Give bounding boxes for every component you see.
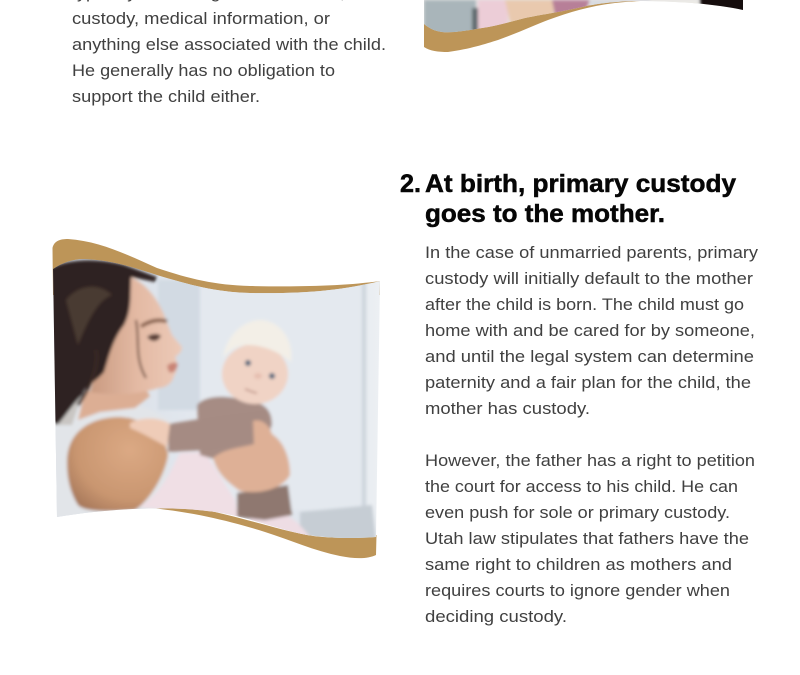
text block: first point continued: custody, medical information, or [72,9,330,28]
text block: primary custody paragraph: mother has custody. [425,399,590,418]
gold wave bottom [140,505,376,558]
text block: first point continued: He generally has no obligation to [72,61,335,80]
hair [50,260,157,424]
text block: primary custody paragraph: and until the legal system can determine [425,347,754,366]
grey wall behind wisps [56,394,82,426]
baby body [197,397,272,465]
text block: father's rights paragraph [425,451,755,626]
heading: point 2: goes to the mother. [425,200,665,228]
neck [77,390,151,421]
eye, brow and lips [147,334,161,341]
text block: primary custody paragraph [425,243,759,418]
text block: father's rights paragraph: requires courts to ignore gender when [425,581,730,600]
text block: primary custody paragraph: In the case of unmarried parents, primary [425,243,759,262]
gold wave top [52,239,380,295]
text block: first point continued: anything else associated with the child. [72,35,386,54]
baby hat [223,320,291,362]
heading: point 2: 2. [400,170,421,198]
baby arm [166,418,202,454]
pink blanket [140,452,238,518]
baby face [222,344,288,404]
text block: father's rights paragraph: Utah law stipulates that fathers have the [425,529,749,548]
shoulder [67,417,168,511]
text block: primary custody paragraph: custody will initially default to the mother [425,269,753,288]
text block: father's rights paragraph: the court for access to his child. He can [425,477,738,496]
tank top [56,410,169,517]
text block: first point continued: support the child either. [72,87,260,106]
text block: father's rights paragraph: deciding custody. [425,607,567,626]
mother hand [213,420,290,492]
image: top photo remnant with gold wave [424,0,750,52]
text block: first point continued [72,0,386,106]
heading: point 2: At birth, primary custody [425,170,736,198]
text block: father's rights paragraph: same right to children as mothers and [425,555,732,574]
text block: primary custody paragraph: paternity and a fair plan for the child, the [425,373,751,392]
text block: primary custody paragraph: after the child is born. The child must go [425,295,744,314]
photo [50,255,385,545]
text block: father's rights paragraph: even push for sole or primary custody. [425,503,730,522]
image: mother holding baby with gold wave frame [50,239,385,558]
baby leg [237,485,292,520]
text block: father's rights paragraph: However, the father has a right to petition [425,451,755,470]
heading: point 2 [400,170,736,228]
baby eyes [245,360,251,366]
baby hand [130,419,170,447]
face [90,276,182,394]
text block: primary custody paragraph: home with and be cared for by someone, [425,321,755,340]
